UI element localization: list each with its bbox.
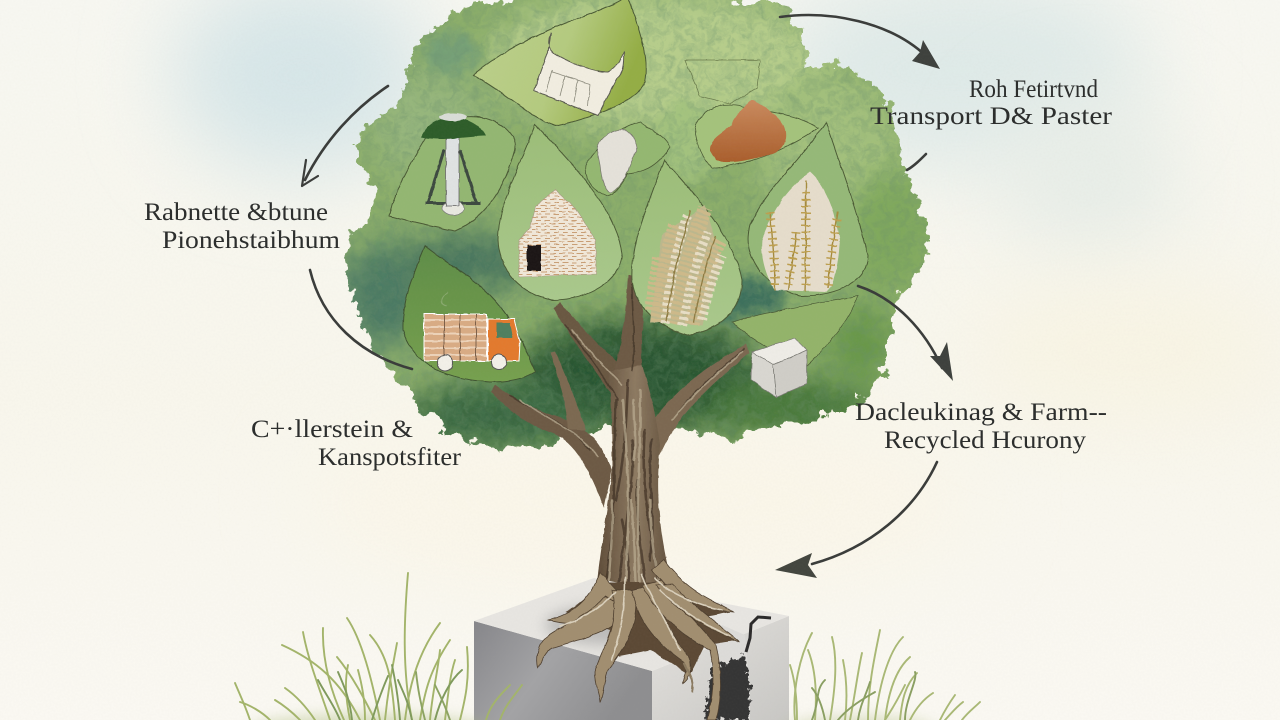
arrow: top left xyxy=(302,86,388,186)
label: right: Recycled Hcurony xyxy=(884,427,1087,454)
concrete block xyxy=(474,578,789,720)
icon: cube xyxy=(751,338,807,397)
leaf: clay soil xyxy=(685,60,818,169)
label: top right: Roh Fetirtvnd xyxy=(969,76,1098,103)
branch: right xyxy=(646,344,749,478)
leaf: white cube xyxy=(732,296,858,397)
icon: grain on pale stone xyxy=(762,172,840,292)
leaf: stone with grain xyxy=(748,122,868,296)
block: right face xyxy=(652,616,789,720)
leaf: top building xyxy=(473,0,646,126)
block: left face xyxy=(474,621,652,720)
label: top right xyxy=(870,76,1113,130)
block: crack xyxy=(705,617,771,720)
leaf: wheat xyxy=(632,160,742,335)
bark streaks xyxy=(510,285,744,596)
label: lower left xyxy=(251,416,462,471)
arrow: bottom right xyxy=(775,462,937,578)
block: top face shadow xyxy=(545,605,675,645)
arrow: right xyxy=(858,286,953,381)
root mass xyxy=(565,582,735,675)
label: lower left: Kanspotsfiter xyxy=(318,444,462,471)
icon: clay mound xyxy=(710,100,786,162)
branch: lower left xyxy=(491,385,612,508)
branch: upper left xyxy=(553,302,630,420)
label: left: Pionehstaibhum xyxy=(162,227,341,254)
icon: brick house xyxy=(519,190,596,277)
leaf: truck xyxy=(403,246,535,382)
arrow: top right stub xyxy=(907,154,926,170)
tree canopy xyxy=(344,0,930,452)
icon: house door xyxy=(527,245,541,271)
icon: orange truck xyxy=(424,292,520,371)
label: left xyxy=(144,199,341,254)
block: top face xyxy=(474,578,789,671)
label: right: Dacleukinag & Farm-- xyxy=(855,399,1107,426)
icon: white building xyxy=(534,33,624,116)
label: lower left: C+·llerstein & xyxy=(251,416,413,443)
icon: wheat bundle xyxy=(650,205,722,326)
label: left: Rabnette &btune xyxy=(144,199,328,226)
tree roots xyxy=(537,560,740,720)
branch: twig xyxy=(550,351,586,430)
grass: left clump xyxy=(235,573,522,720)
leaf: brick house xyxy=(498,125,622,300)
grass: right clump xyxy=(785,630,980,720)
icon: white stone xyxy=(597,130,637,193)
arrow: top right xyxy=(780,15,940,69)
tree trunk and branches xyxy=(491,275,749,600)
label: top right: Transport D& Paster xyxy=(870,103,1113,130)
leaf: tower xyxy=(389,113,515,231)
label: right xyxy=(855,399,1107,454)
icon: tower xyxy=(421,113,486,215)
leaf: small stone xyxy=(586,122,670,196)
arrow: lower left xyxy=(310,270,412,369)
arrows xyxy=(302,15,953,578)
branch: centre xyxy=(612,275,652,450)
trunk xyxy=(595,365,676,600)
